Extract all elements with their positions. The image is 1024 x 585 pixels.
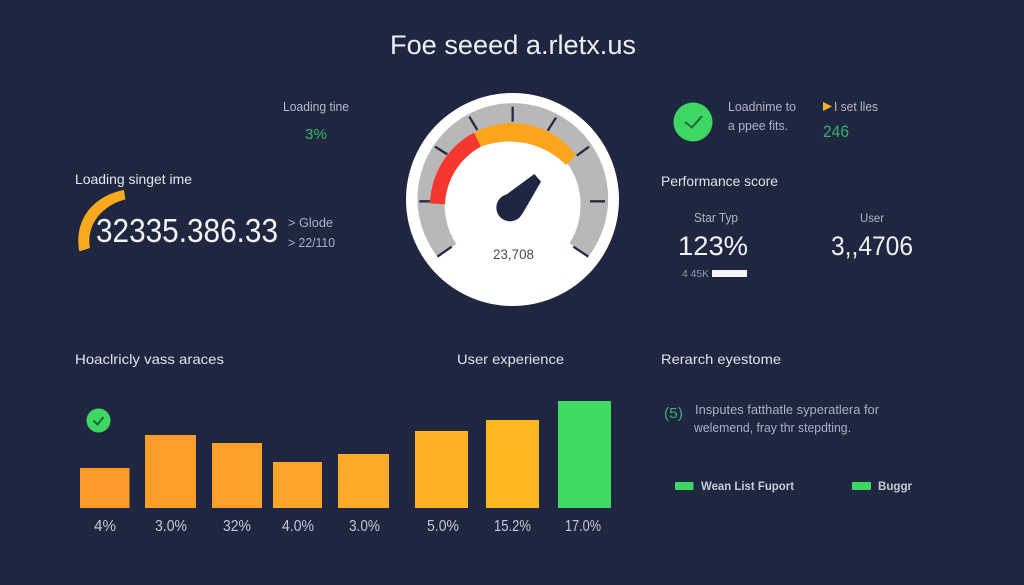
files value: 246 <box>823 122 849 141</box>
body text: Insputes fatthatle syperatlera for <box>695 403 879 417</box>
bar labels: 32% <box>223 518 251 535</box>
stat: loading time <box>283 100 349 143</box>
big number: 32335.386.33 <box>96 212 278 249</box>
stat: star type <box>678 211 748 280</box>
icon: green check small <box>86 408 110 432</box>
gauge track <box>417 103 608 257</box>
body text: welemend, fray thr stepdting. <box>693 421 851 435</box>
gauge ticks <box>419 107 605 257</box>
bar labels: 15.2% <box>494 518 531 535</box>
icon: green check <box>674 102 712 142</box>
gauge orange zone <box>474 123 576 165</box>
bar labels: 4.0% <box>282 518 314 535</box>
panel: research <box>661 351 912 493</box>
number badge: (5) <box>664 406 683 422</box>
side labels: > 22/110 <box>288 236 335 250</box>
stat: user: User <box>860 211 884 225</box>
status text: Loadnime to <box>728 100 796 114</box>
stat: star type: 4 45K <box>682 268 709 280</box>
panel: performance score <box>661 174 913 280</box>
stat: star type: Star Typ <box>694 211 738 225</box>
bar labels: 3.0% <box>155 518 187 535</box>
side labels <box>288 216 335 250</box>
heading: bars: Hoaclricly vass araces <box>75 351 224 367</box>
heading: Rerarch eyestome <box>661 351 781 367</box>
side labels: > Glode <box>288 216 333 230</box>
stat: user <box>831 211 913 261</box>
heading: user experience: User experience <box>457 351 564 367</box>
icon: orange arc <box>78 190 125 251</box>
bar chart <box>80 401 611 535</box>
heading: loading singet ime: Loading singet ime <box>75 171 192 187</box>
files label: I set lles <box>834 100 878 114</box>
panel: loading speed <box>75 171 335 251</box>
stat: loading time: Loading tine <box>283 100 349 114</box>
body text <box>693 403 879 435</box>
status text: a ppee fits. <box>728 119 788 133</box>
legend: Wean List Fuport <box>701 479 794 493</box>
gauge <box>406 93 619 306</box>
panel: status check <box>674 100 878 142</box>
legend: Buggr <box>878 479 912 493</box>
legend <box>675 479 912 493</box>
stat: loading time: 3% <box>305 126 327 143</box>
gauge inner face <box>445 139 580 274</box>
bar labels <box>94 518 601 535</box>
bar labels: 17.0% <box>565 518 601 535</box>
gauge red zone <box>430 133 481 204</box>
title: Foe seeed a.rletx.us <box>390 30 636 60</box>
stat: user: 3,,4706 <box>831 231 913 261</box>
gauge needle <box>496 174 541 221</box>
icon: orange play <box>823 102 832 111</box>
bar labels: 3.0% <box>349 518 380 535</box>
gauge value: 23,708 <box>493 247 534 262</box>
bar labels: 4% <box>94 518 116 535</box>
status text <box>728 100 796 133</box>
heading: Performance score <box>661 174 778 189</box>
bar labels: 5.0% <box>427 518 459 535</box>
stat: star type: 123% <box>678 231 748 261</box>
